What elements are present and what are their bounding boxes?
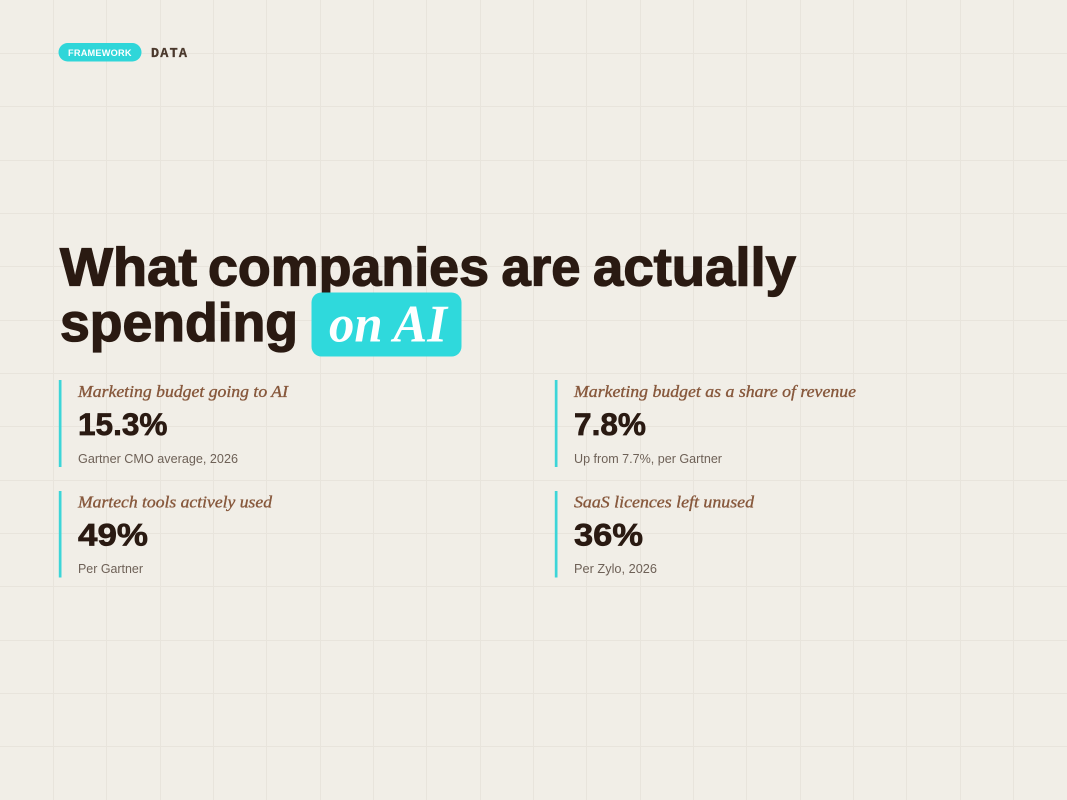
highlight: on AI: on AI	[329, 296, 449, 354]
stat: marketing budget as share of revenue: Marketing budget as a share of revenue	[573, 382, 856, 401]
title: actually	[593, 238, 796, 298]
stat: marketing budget as share of revenue	[555, 380, 856, 467]
stat: marketing budget going to AI: 15.3%	[78, 406, 168, 442]
stat: martech tools actively used: Per Gartner	[78, 561, 144, 576]
stat: martech tools actively used: 49%	[78, 516, 148, 552]
header tag: framework data	[58, 43, 188, 62]
label: data: DATA	[151, 47, 188, 62]
stat: SaaS licences left unused: 36%	[574, 516, 643, 552]
stat: marketing budget going to AI: Marketing budget going to AI	[77, 382, 289, 401]
title: spending	[60, 294, 298, 353]
stat: SaaS licences left unused: Per Zylo, 2026	[574, 561, 657, 576]
stat: marketing budget as share of revenue: Up from 7.7%, per Gartner	[574, 451, 723, 466]
stat: martech tools actively used: Martech tools actively used	[77, 492, 273, 512]
stat: marketing budget going to AI	[59, 380, 289, 467]
title	[60, 238, 796, 356]
badge: framework: FRAMEWORK	[68, 48, 132, 58]
stat: SaaS licences left unused: SaaS licences left unused	[574, 492, 755, 512]
stat: martech tools actively used	[59, 491, 273, 578]
title: are	[502, 238, 580, 298]
stat: marketing budget going to AI: Gartner CMO average, 2026	[78, 451, 238, 466]
stat: SaaS licences left unused	[555, 491, 755, 578]
title: What	[60, 238, 197, 298]
title: companies	[208, 238, 489, 298]
stat: marketing budget as share of revenue: 7.8%	[574, 406, 646, 442]
